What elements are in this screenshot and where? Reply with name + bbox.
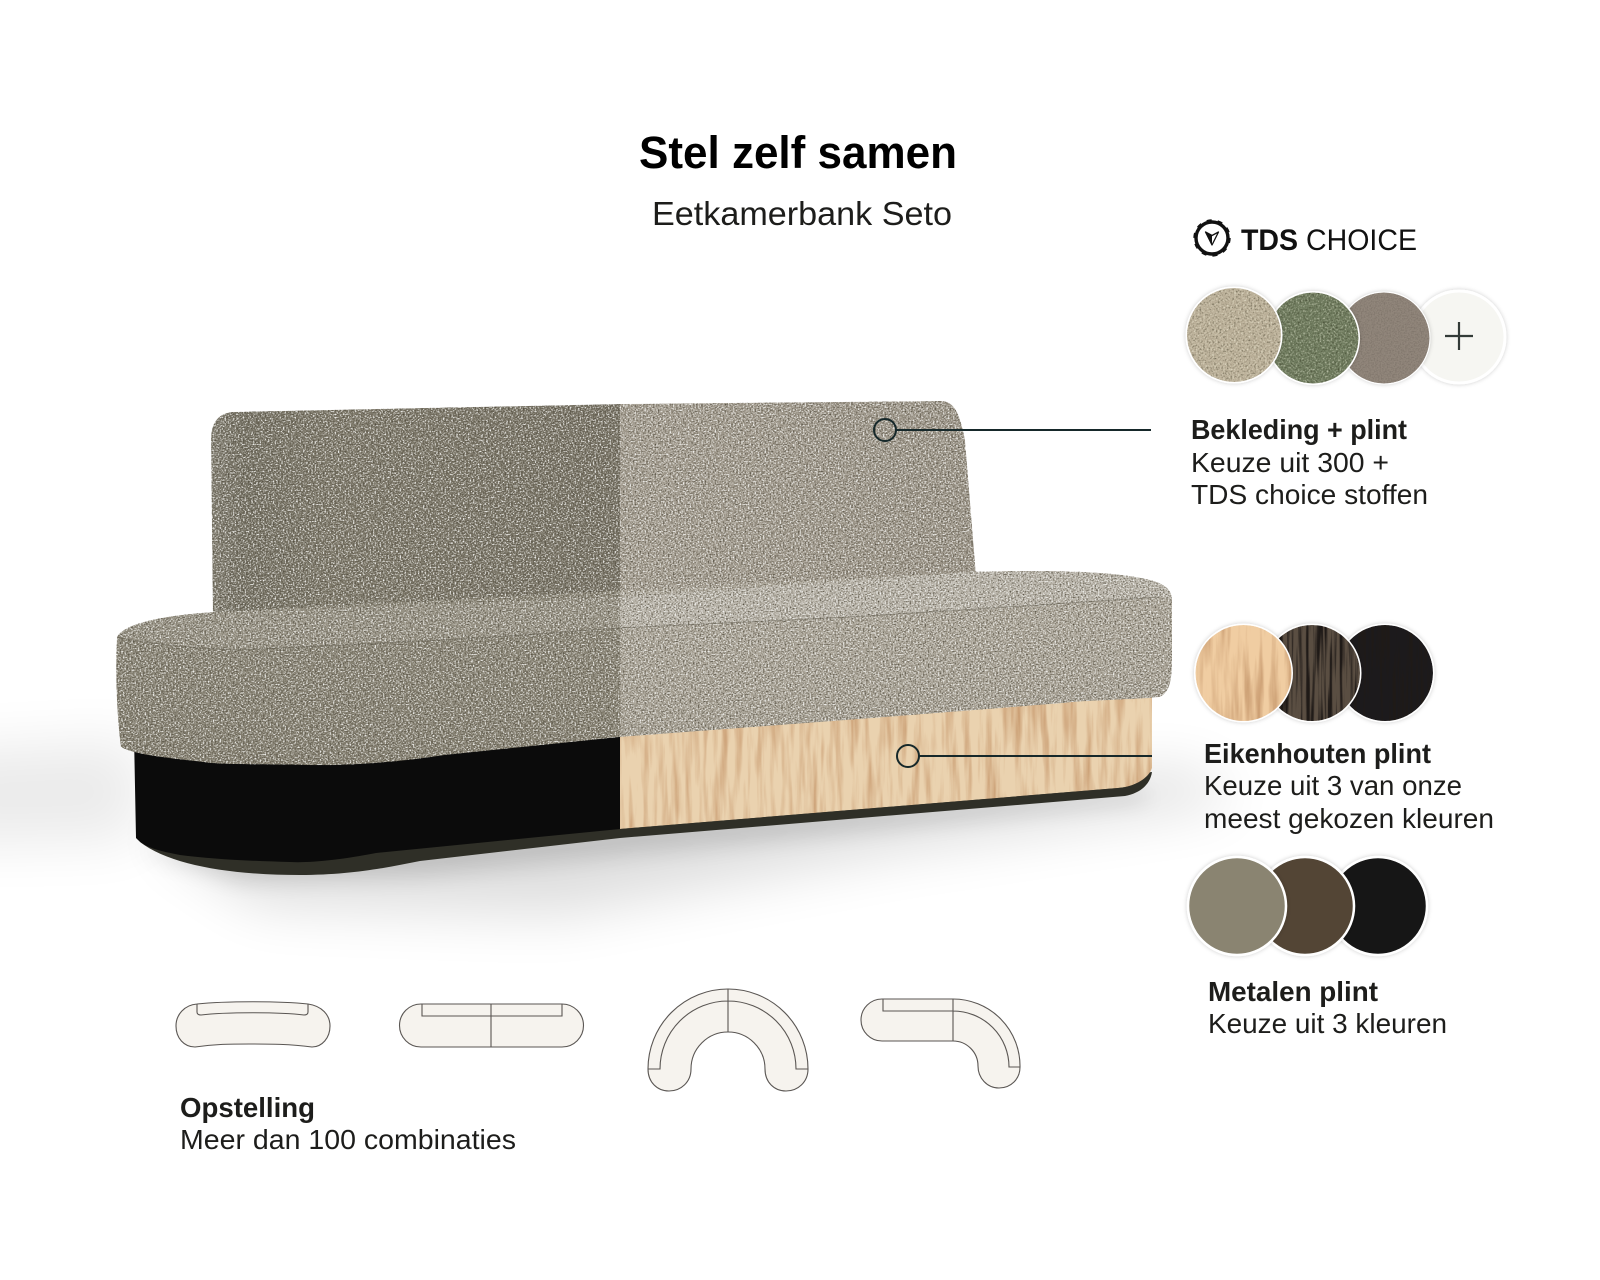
text: layout: Meer dan 100 combinaties [180, 1124, 516, 1155]
black plinth [134, 720, 620, 862]
swatch: plus [1413, 291, 1505, 383]
swatch: grey metal [1188, 857, 1286, 955]
layout icons [176, 989, 1020, 1091]
swatch: taupe [1338, 292, 1430, 384]
backrest left half [211, 404, 621, 625]
text: upholstery: Keuze uit 300 + [1191, 447, 1389, 478]
text: oak plinth [1204, 738, 1494, 834]
upholstery swatches [1186, 286, 1505, 385]
seat top left half [117, 597, 620, 650]
seat piping [117, 597, 1160, 650]
sofa illustration [0, 401, 1240, 915]
swatch: beige [1186, 286, 1282, 384]
text: oak plinth: Eikenhouten plint [1204, 738, 1431, 769]
swatch: brown metal [1256, 857, 1354, 955]
text: oak plinth: meest gekozen kleuren [1204, 803, 1494, 834]
subtitle: Eetkamerbank Seto [652, 195, 952, 232]
floor shadow [0, 740, 1240, 915]
icon: badge [1194, 220, 1230, 256]
title: Stel zelf samen [639, 127, 957, 178]
seat front left half [116, 590, 620, 766]
swatch: natural oak [1194, 624, 1293, 722]
text: metal plinth [1208, 976, 1447, 1039]
metal swatches [1188, 857, 1427, 955]
layout: curved bench [176, 1002, 330, 1047]
callout: upholstery marker [874, 419, 1151, 441]
text: layout [180, 1092, 516, 1155]
badge text: TDS CHOICE [1241, 224, 1417, 257]
backrest right half [620, 401, 976, 610]
layout: half circle [648, 989, 808, 1091]
oak swatches [1194, 624, 1434, 722]
text: metal plinth: Metalen plint [1208, 976, 1378, 1007]
plinth underside shadow [136, 772, 1152, 875]
text: upholstery [1191, 414, 1428, 510]
callout: oak plinth marker [897, 745, 1152, 767]
text: upholstery: TDS choice stoffen [1191, 479, 1428, 510]
TDS choice badge [1194, 220, 1417, 257]
seat front right half [620, 571, 1172, 737]
swatch: black metal [1329, 857, 1427, 955]
text: layout: Opstelling [180, 1092, 315, 1123]
layout: straight bench [400, 1004, 584, 1047]
text: oak plinth: Keuze uit 3 van onze [1204, 770, 1462, 801]
text: upholstery: Bekleding + plint [1191, 414, 1407, 445]
swatch: smoked wood [1262, 624, 1362, 722]
text: metal plinth: Keuze uit 3 kleuren [1208, 1008, 1447, 1039]
layout: corner bench [861, 999, 1020, 1088]
swatch: black wood [1336, 624, 1434, 722]
oak plinth [620, 685, 1152, 829]
swatch: green [1266, 291, 1360, 385]
seat top right half [620, 571, 1172, 628]
